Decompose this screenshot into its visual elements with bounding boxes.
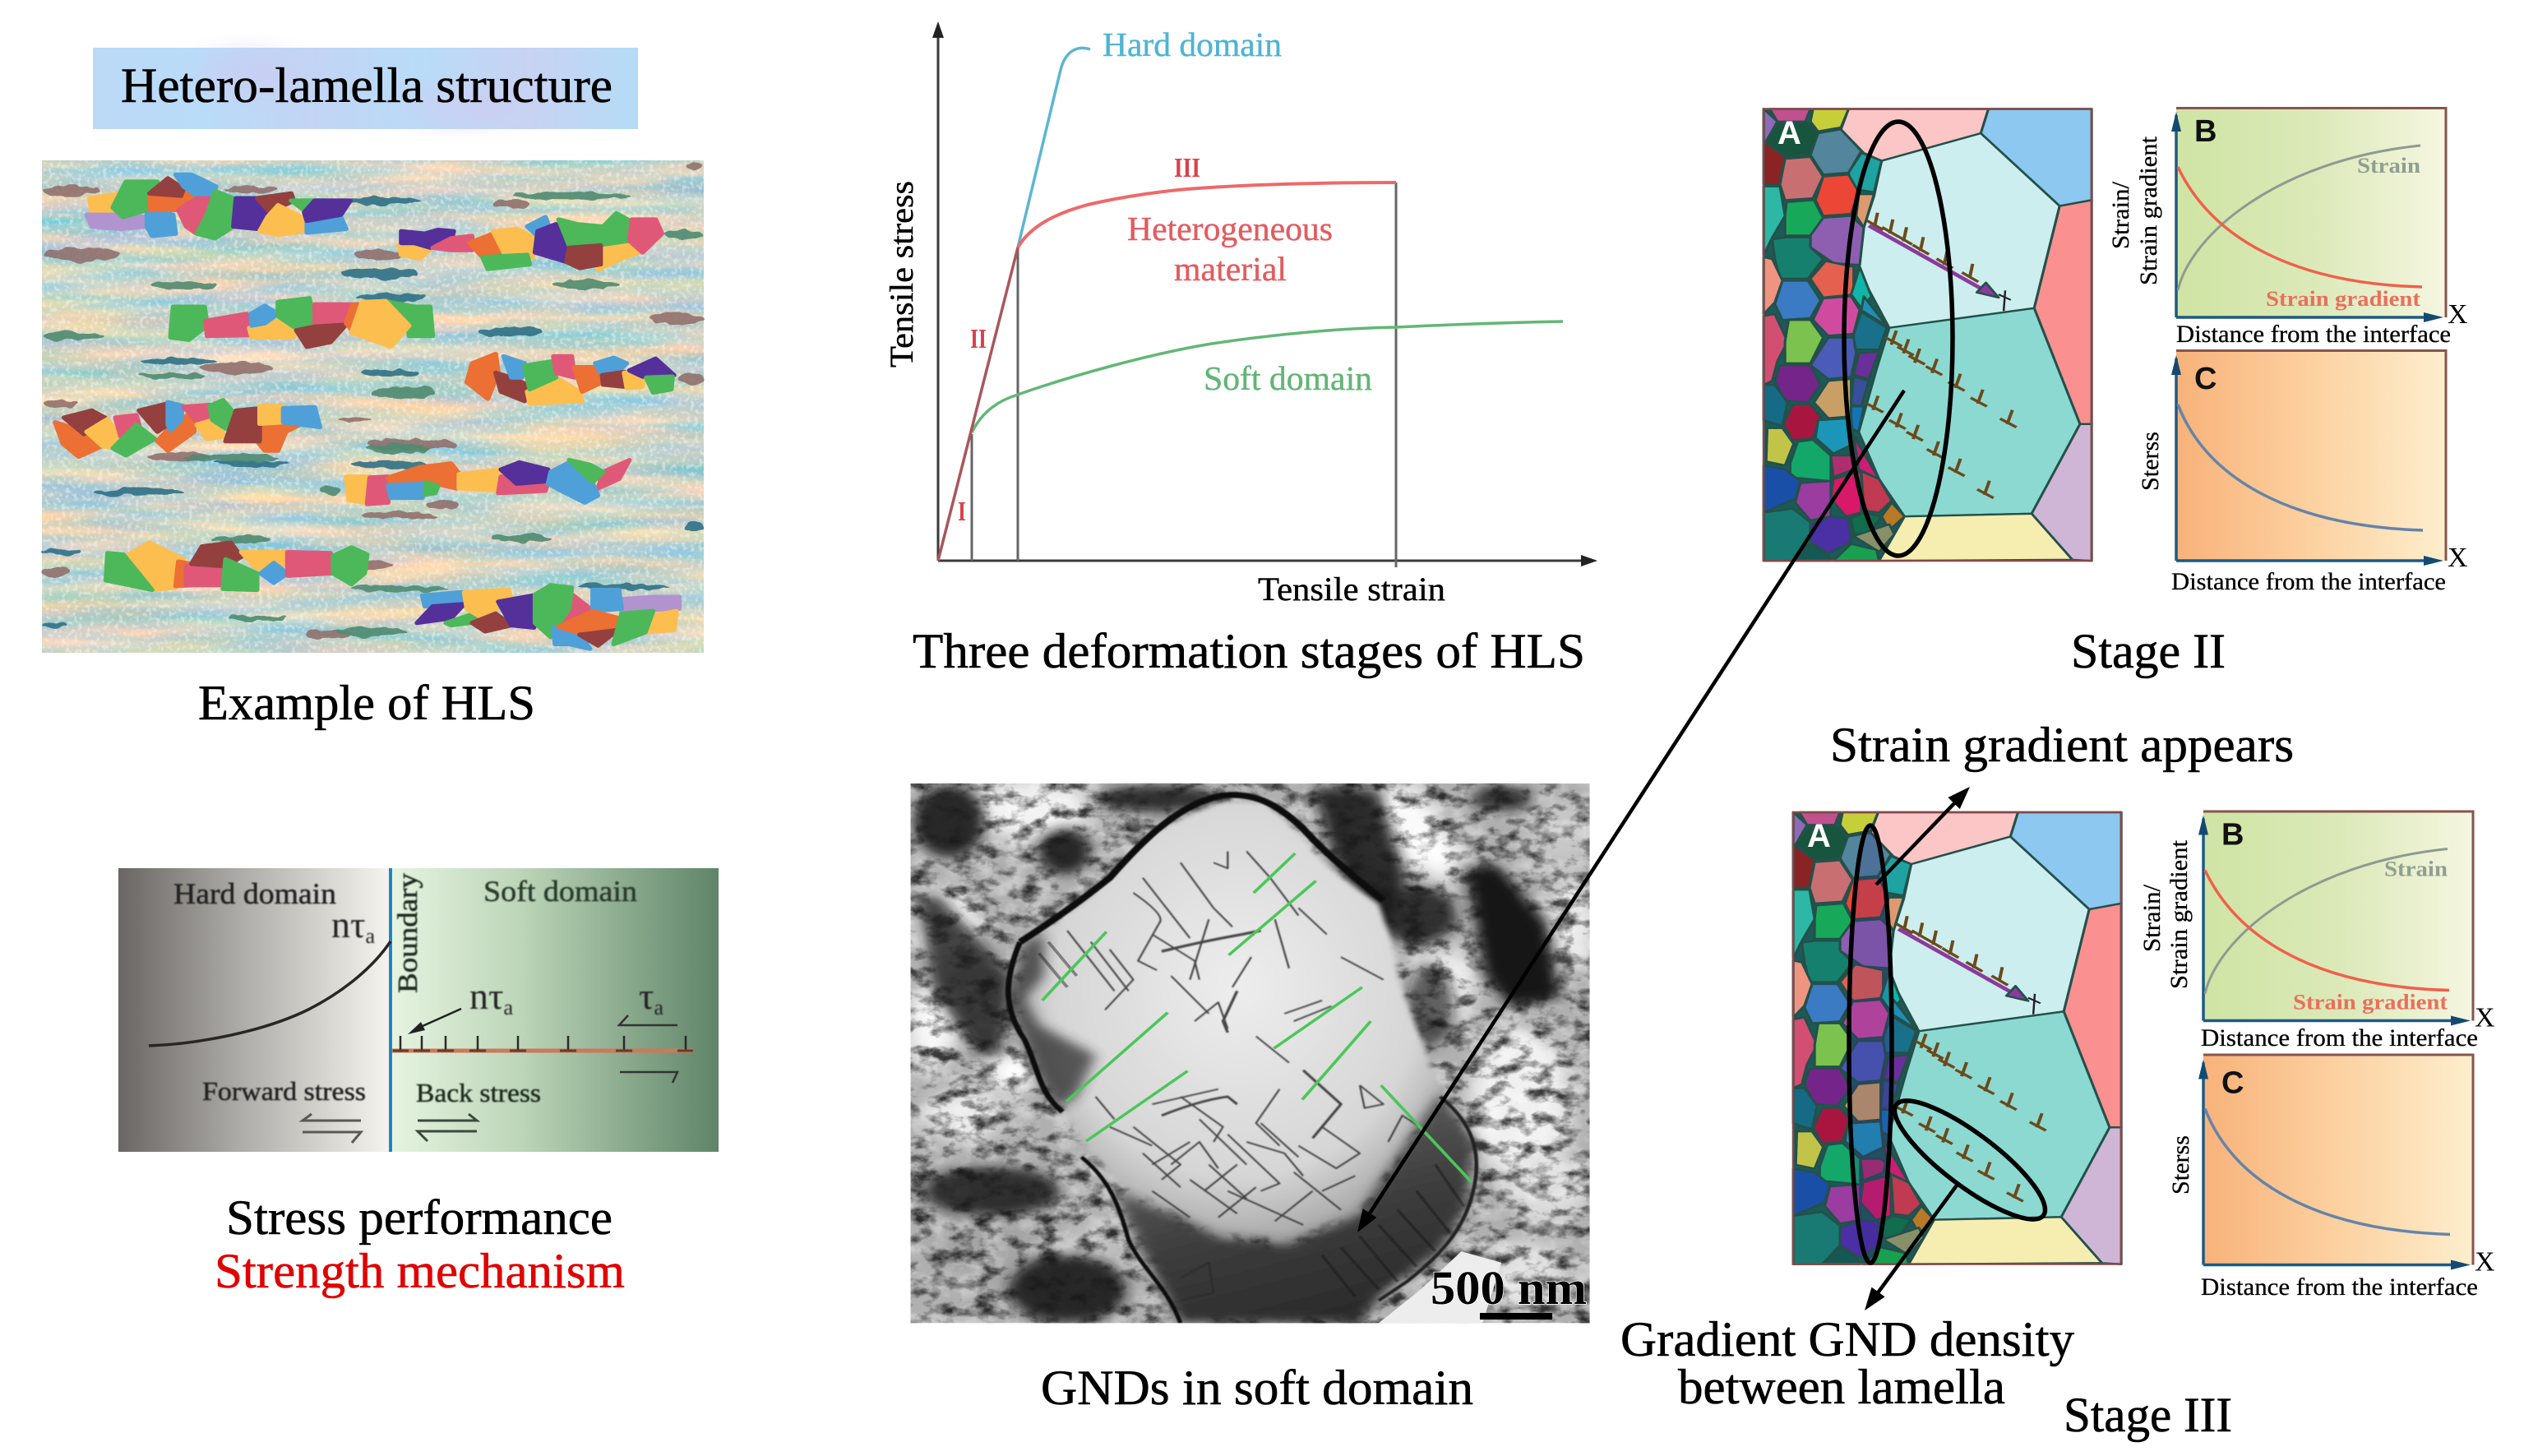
dislocations xyxy=(1067,852,1426,1301)
label: back stress: Back stress xyxy=(416,1078,541,1107)
label: tau a: τ xyxy=(639,975,654,1017)
panel: stage III plot C stress xyxy=(2198,1055,2495,1278)
label: strain: Strain xyxy=(2384,857,2448,881)
label: hard domain: Hard domain xyxy=(173,877,336,910)
label: x axis X: X xyxy=(2475,1246,2495,1278)
slip plane with dislocations xyxy=(392,1036,693,1051)
callout: gradient GND density between lamella xyxy=(1620,1312,2074,1414)
title: hetero-lamella structure: Hetero-lamella structure xyxy=(121,58,613,113)
label: C: C xyxy=(2221,1065,2244,1100)
label: n tau a at boundary: nτ xyxy=(331,904,365,945)
curve: stress xyxy=(2178,404,2423,530)
ellipse: gradient GND zone xyxy=(1880,1084,2059,1236)
curve: stress in hard domain xyxy=(149,941,391,1046)
label: n tau a at pile-up: nτ xyxy=(469,975,503,1017)
panel: stage II plot B strain xyxy=(2171,109,2468,330)
ellipse: interface zone xyxy=(1849,825,1892,1263)
curve: hard domain xyxy=(1018,48,1090,247)
band streaks xyxy=(1039,942,1463,1297)
caption: strength mechanism: Strength mechanism xyxy=(215,1244,625,1298)
cluster 8 of hard lamella grains xyxy=(417,585,679,649)
x axis title: distance plot B stage II: Distance from the interface xyxy=(2176,321,2451,348)
curve: strain gradient xyxy=(2178,167,2422,287)
y axis title: strain / strain gradient stage III: Strain/ xyxy=(2138,884,2166,952)
label: hard domain: Hard domain xyxy=(1103,25,1282,63)
y axis title: strain / strain gradient stage III xyxy=(2138,839,2193,989)
curve: soft domain xyxy=(972,321,1563,432)
title: hetero-lamella structure xyxy=(93,48,638,129)
soft-domain grain interior xyxy=(1020,802,1440,1240)
label: n tau a at boundary: a xyxy=(365,924,375,948)
panel: TEM micrograph of GNDs in soft domain xyxy=(907,779,1596,1323)
caption: stage III: Stage III xyxy=(2064,1388,2232,1442)
scale bar label: 500 nm xyxy=(1431,1261,1587,1315)
panel: stress mechanism diagram xyxy=(118,868,719,1152)
caption: three deformation stages: Three deformation stages of HLS xyxy=(913,624,1585,678)
label: tau a: a xyxy=(654,996,664,1019)
y axis title: strain / strain gradient stage II xyxy=(2107,136,2162,285)
cluster 6 of hard lamella grains xyxy=(346,460,630,504)
callout: strain gradient appears: Strain gradient appears xyxy=(1830,718,2294,772)
axes xyxy=(938,26,1591,561)
ellipse: lamellar interface zone xyxy=(1844,122,1953,556)
y axis title: Tensile stress xyxy=(883,181,920,367)
label: stage II: II xyxy=(970,324,987,354)
elastic line xyxy=(938,247,1018,561)
label: B: B xyxy=(2221,817,2244,852)
label: C: C xyxy=(2194,362,2217,396)
x axis title: distance plot B stage III: Distance from the interface xyxy=(2201,1024,2478,1052)
label: soft domain: Soft domain xyxy=(483,875,637,908)
arrow: to strain gradient appears xyxy=(1876,787,1970,885)
label: strain gradient: Strain gradient xyxy=(2293,990,2448,1015)
cluster 5 of hard lamella grains xyxy=(55,400,320,457)
green slip-trace lines xyxy=(1042,853,1472,1182)
stage guide lines xyxy=(972,183,1396,567)
panel: stage II plot C stress xyxy=(2171,350,2468,573)
arrow: pointer to boundary pile-up xyxy=(408,1009,461,1034)
label: strain: Strain xyxy=(2357,154,2421,178)
y axis title: stress stage III: Sterss xyxy=(2167,1135,2194,1195)
arrows: back stress shear xyxy=(418,1114,477,1141)
cluster 2 of hard lamella grains xyxy=(399,213,662,270)
arrow: applied shear top xyxy=(619,1015,677,1025)
label: A: A xyxy=(1777,115,1801,151)
label: stage I: I xyxy=(958,497,966,527)
label: soft domain: Soft domain xyxy=(1204,359,1372,397)
x axis title: distance plot C stage III: Distance from the interface xyxy=(2201,1273,2478,1301)
curve: heterogeneous material xyxy=(1018,183,1396,247)
y axis title: strain / strain gradient stage II: Strain gradient xyxy=(2135,136,2162,285)
panel: stage III plot B strain xyxy=(2198,811,2495,1033)
caption: GNDs in soft domain: GNDs in soft domain xyxy=(1041,1361,1473,1415)
grain boundary xyxy=(1020,795,1384,942)
arrow: stage II grain to TEM micrograph xyxy=(1357,391,1904,1232)
arrow: applied shear bottom xyxy=(620,1072,677,1083)
arrows: forward stress shear xyxy=(303,1114,361,1143)
label: heterogeneous material xyxy=(1127,210,1333,288)
cluster 7 of hard lamella grains xyxy=(106,543,368,590)
curve: strain xyxy=(2205,848,2448,993)
label: strain gradient: Strain gradient xyxy=(2266,287,2420,311)
panel: stage III grain schematic A xyxy=(1793,812,2121,1264)
x axis title: distance plot C stage II: Distance from the interface xyxy=(2171,568,2446,595)
y axis title: stress stage II: Sterss xyxy=(2137,432,2164,491)
y axis title: strain / strain gradient stage II: Strain/ xyxy=(2107,181,2134,249)
caption: stage II: Stage II xyxy=(2071,624,2226,678)
y axis title: strain / strain gradient stage III: Strain gradient xyxy=(2166,839,2193,989)
label: boundary: Boundary xyxy=(393,873,423,993)
label: heterogeneous material: material xyxy=(1174,250,1287,288)
curve: strain gradient xyxy=(2205,870,2449,990)
arrow: to gradient GND density xyxy=(1865,1183,1958,1310)
label: heterogeneous material: Heterogeneous xyxy=(1127,210,1333,247)
curve: strain xyxy=(2178,146,2420,290)
scale bar xyxy=(1480,1313,1552,1320)
label: n tau a at pile-up: a xyxy=(503,996,513,1019)
caption: stress performance: Stress performance xyxy=(226,1190,613,1245)
label: A: A xyxy=(1807,818,1831,854)
x axis title: Tensile strain xyxy=(1258,571,1445,608)
chart: three deformation stages stress-strain curves xyxy=(883,21,1597,608)
cluster 3 of hard lamella grains xyxy=(170,298,432,347)
cluster 4 of hard lamella grains xyxy=(467,354,674,404)
callout: gradient GND density between lamella: between lamella xyxy=(1678,1360,2005,1414)
callout: gradient GND density between lamella: Gradient GND density xyxy=(1620,1312,2074,1366)
label: forward stress: Forward stress xyxy=(202,1076,366,1106)
curve: stress xyxy=(2205,1108,2450,1235)
cluster 1 of hard lamella grains xyxy=(86,174,350,238)
label: x axis X: X xyxy=(2475,1003,2495,1033)
label: stage III: III xyxy=(1174,153,1200,183)
caption: example of HLS: Example of HLS xyxy=(198,676,535,730)
panel: example of HLS micrograph xyxy=(41,160,704,653)
label: x axis X: X xyxy=(2448,299,2468,330)
label: x axis X: X xyxy=(2448,543,2468,573)
label: B: B xyxy=(2194,114,2217,149)
panel: stage II grain schematic A xyxy=(1764,109,2092,561)
